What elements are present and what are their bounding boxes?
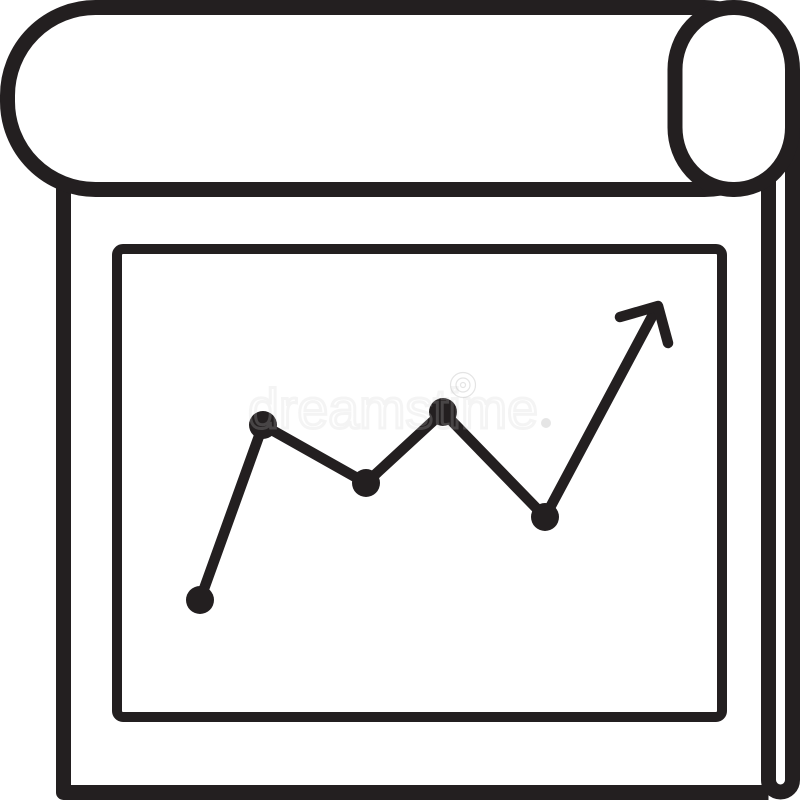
watermark dot <box>541 418 551 428</box>
icon: rolled top of scroll <box>8 8 792 190</box>
watermark text: dreamstime <box>248 377 538 440</box>
icon: roll end cap <box>675 8 792 190</box>
arrow head <box>620 306 668 343</box>
data points <box>186 398 559 614</box>
line chart with upward arrow <box>186 306 668 614</box>
watermark logo <box>450 372 476 398</box>
watermark <box>248 372 551 440</box>
panel: chart frame <box>117 249 722 717</box>
chart line <box>200 309 656 600</box>
icon: scroll sheet <box>64 100 792 792</box>
